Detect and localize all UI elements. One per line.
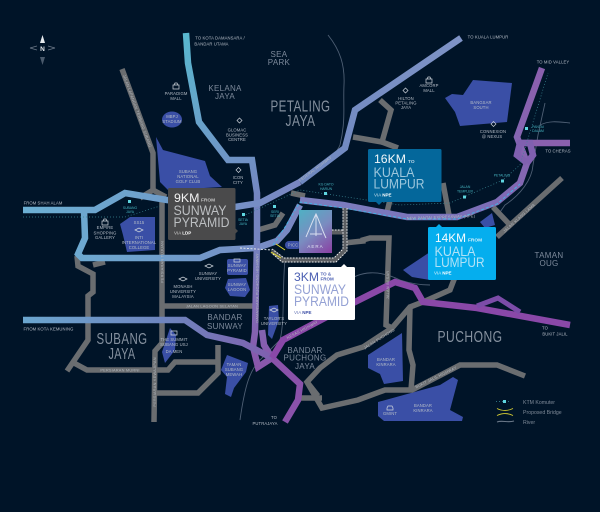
road labels: PERSIARAN TUJUAN xyxy=(160,241,164,283)
callout: 14km from Kuala Lumpur: 14KM xyxy=(435,231,466,245)
callout: 16km to Kuala Lumpur: LUMPUR xyxy=(374,176,425,192)
place labels: SS15 xyxy=(134,220,145,225)
place labels: NATIONAL xyxy=(177,174,199,179)
area: blue near 14km xyxy=(403,252,430,280)
place labels: SUBANG xyxy=(225,367,243,372)
station labels: TEMPLER xyxy=(457,190,474,194)
district labels: JAYA xyxy=(108,346,136,363)
direction labels: BUKIT JALIL xyxy=(542,332,568,336)
callout: 9km from Sunway Pyramid: PYRAMID xyxy=(174,215,230,230)
road labels: JALAN LAGOON SELATAN xyxy=(186,304,238,308)
place labels: GLOMAC xyxy=(228,128,246,132)
district labels: PUCHONG xyxy=(438,329,502,346)
direction labels: TO KUALA LUMPUR xyxy=(468,34,508,40)
place labels: SUNWAY xyxy=(228,282,246,287)
station labels: HARUN xyxy=(320,187,333,191)
direction labels: TO CHERAS xyxy=(545,148,571,154)
district labels: PETALING xyxy=(270,98,330,116)
place labels: BANGSAR xyxy=(470,100,492,105)
callout: 14km from Kuala Lumpur: LUMPUR xyxy=(434,255,485,270)
road: from Kota Damansara xyxy=(186,33,257,240)
district labels: JAYA xyxy=(215,92,235,101)
area: SS15 INTI xyxy=(120,217,155,252)
place labels: TAYLOR'S xyxy=(264,316,284,321)
area: Taman Subang Mewah xyxy=(221,355,248,397)
district labels: SEA xyxy=(271,50,288,59)
direction labels: TO xyxy=(542,326,549,330)
callout: 3km to and from Sunway Pyramid xyxy=(288,264,355,320)
road: interchange loop xyxy=(517,143,533,163)
road: to Bukit Jalil xyxy=(272,282,570,358)
direction labels: FROM KOTA KEMUNING xyxy=(24,326,73,332)
place labels: PYRAMID xyxy=(227,268,247,273)
place labels: GMINT xyxy=(383,411,397,416)
place labels: GALLERY xyxy=(95,235,115,240)
district labels: PARK xyxy=(268,58,291,67)
road labels: JALAN LAPANGAN TERBANG SUBANG xyxy=(122,74,153,148)
place labels: EMPIRE xyxy=(97,225,113,230)
station labels: SETIA xyxy=(238,218,249,222)
place labels: UNIVERSITY xyxy=(170,289,196,294)
callout: 14km from Kuala Lumpur: KUALA xyxy=(434,244,476,259)
road labels: DAMANSARA PUCHONG HIGHWAY xyxy=(254,253,260,323)
district labels: SUBANG xyxy=(96,331,148,348)
district labels: TAMAN xyxy=(535,251,563,260)
district labels xyxy=(96,50,563,371)
road labels: JALAN BESAR xyxy=(385,271,390,299)
road labels: PERSIARAN MURNI xyxy=(100,368,140,372)
area: Bandar Kinrara north xyxy=(368,333,403,384)
road labels: NESAS HIGHWAY xyxy=(286,319,319,340)
place labels: KINRARA xyxy=(413,408,433,413)
place labels: INTERNATIONAL xyxy=(122,240,157,245)
place labels: INTI xyxy=(135,235,143,240)
callout: 9km from Sunway Pyramid xyxy=(168,188,238,240)
district labels: BANDAR xyxy=(207,313,243,322)
Aera logo tile xyxy=(299,210,332,253)
place labels: TO xyxy=(271,415,278,420)
road: from Kota Kemuning xyxy=(23,320,272,358)
district labels: KELANA xyxy=(208,84,242,93)
direction labels: BANDAR UTAMA xyxy=(194,42,229,46)
district labels: BANDAR xyxy=(287,346,323,355)
station labels: SERI xyxy=(271,210,279,214)
road: LDP branch xyxy=(78,205,300,258)
road labels xyxy=(100,74,536,407)
road: Federal Highway from Shah Alam xyxy=(23,182,300,210)
callout: 14km from Kuala Lumpur xyxy=(428,224,496,280)
callout: 16km to Kuala Lumpur xyxy=(368,149,442,205)
place labels: SOUTH xyxy=(473,105,489,110)
area: Bandar Kinrara south xyxy=(378,377,463,421)
callout: 3km to and from Sunway Pyramid: 3KM xyxy=(294,270,319,284)
station labels: DALAM xyxy=(532,129,544,133)
rivers xyxy=(240,35,570,420)
station labels: JALAN xyxy=(460,185,471,189)
place labels: UNIVERSITY xyxy=(195,276,221,281)
callout: 16km to Kuala Lumpur: VIA NPE xyxy=(374,192,392,198)
callout: 9km from Sunway Pyramid: 9KM xyxy=(174,191,200,205)
callout: 3km to and from Sunway Pyramid: FROM xyxy=(320,276,334,282)
station labels: PETALING xyxy=(494,174,511,178)
station labels: SETIA xyxy=(270,214,281,218)
road: to Cheras xyxy=(520,140,570,146)
direction labels: FROM SHAH ALAM xyxy=(24,200,63,206)
place labels: GOLF CLUB xyxy=(176,179,200,184)
district labels: SUNWAY xyxy=(207,322,243,331)
road: NPE east xyxy=(300,68,542,217)
area: Subang National Golf Club xyxy=(156,137,222,190)
place labels: @ NEXUS xyxy=(482,134,502,139)
road labels: JALAN PUCHONG xyxy=(363,327,396,350)
district labels: JAYA xyxy=(286,113,316,130)
legend xyxy=(496,400,562,426)
place labels: STADIUM xyxy=(162,119,182,124)
place labels: LAGOON xyxy=(228,287,246,292)
place labels: BUSINESS xyxy=(226,132,248,138)
callout: 14km from Kuala Lumpur: FROM xyxy=(468,238,482,244)
place labels: JAYA xyxy=(401,105,411,110)
station labels: SUBANG xyxy=(123,206,138,210)
station labels: PANTAI xyxy=(532,125,544,129)
station labels: JAYA xyxy=(126,210,135,214)
place labels: BANDAR xyxy=(414,403,432,408)
compass xyxy=(30,35,55,65)
blue district areas xyxy=(120,80,512,421)
highways xyxy=(23,33,570,422)
place labels: COLLEGE xyxy=(129,245,149,250)
callout: 9km from Sunway Pyramid: VIA LDP xyxy=(174,230,191,236)
area: PICC xyxy=(285,241,301,249)
station labels: KG DATO xyxy=(319,182,334,186)
area: MBPJ stadium xyxy=(162,112,182,128)
place labels: MALL xyxy=(423,88,435,93)
road labels: NEW PANTAI EXPRESSWAY (NPE) xyxy=(407,213,476,221)
road labels: BUKIT JALIL HIGHWAY xyxy=(414,365,457,389)
place labels: TAMAN xyxy=(227,362,241,367)
legend: Proposed Bridge xyxy=(523,410,562,416)
area: Sunway Pyramid xyxy=(227,259,248,275)
place labels: PARADIGM xyxy=(165,91,188,96)
direction labels xyxy=(24,34,571,336)
area: Da Men xyxy=(162,328,176,363)
callout: 16km to Kuala Lumpur: TO xyxy=(408,159,415,165)
Aera logo tile: AERA xyxy=(307,244,324,249)
road: to Putrajaya xyxy=(272,358,300,422)
station labels: JAYA xyxy=(239,222,248,226)
callout: 3km to and from Sunway Pyramid: VIA NPE xyxy=(294,310,312,315)
district labels: JAYA xyxy=(295,362,315,371)
area: Taylor's University xyxy=(268,305,279,339)
place labels: BANDAR xyxy=(377,357,395,362)
compass: N xyxy=(40,46,45,53)
place labels: SUBANG USJ xyxy=(160,342,188,347)
place labels: THE SUMMIT xyxy=(160,337,188,342)
direction labels: TO MID VALLEY xyxy=(537,60,569,64)
place labels: CENTRE xyxy=(228,137,246,142)
legend: KTM Komuter xyxy=(523,400,555,406)
place labels: DA MEN xyxy=(166,349,182,354)
direction labels: TO KOTA DAMANSARA / xyxy=(195,36,245,40)
road: Federal Highway to Kuala Lumpur xyxy=(300,38,461,182)
place labels: KINRARA xyxy=(376,362,396,367)
place labels: SUBANG xyxy=(179,169,197,174)
callout: 3km to and from Sunway Pyramid: SUNWAY xyxy=(294,282,346,297)
grey local roads xyxy=(67,69,562,422)
place labels: MEWAH xyxy=(226,372,242,377)
road labels: FEDERAL HIGHWAY xyxy=(298,155,333,183)
area: small south of NPE xyxy=(480,213,495,228)
callout: 3km to and from Sunway Pyramid: PYRAMID xyxy=(294,294,349,309)
place labels: UNIVERSITY xyxy=(261,321,287,326)
road: white dashed Aera link xyxy=(240,248,272,250)
legend: River xyxy=(523,420,535,426)
place labels: ICON xyxy=(233,175,243,180)
place labels: MALAYSIA xyxy=(172,294,194,299)
district labels: OUG xyxy=(539,259,559,268)
station labels xyxy=(123,125,544,226)
PICC label: PICC xyxy=(288,242,298,248)
callout: 9km from Sunway Pyramid: FROM xyxy=(201,198,215,204)
area: Sunway Lagoon xyxy=(225,278,250,297)
place labels: MONASH xyxy=(174,284,192,289)
place labels: PUTRAJAYA xyxy=(253,421,278,426)
proposed link around Aera xyxy=(272,208,347,262)
KTM stations xyxy=(128,127,528,216)
callout: 14km from Kuala Lumpur: VIA NPE xyxy=(434,270,452,276)
place labels: CITY xyxy=(233,180,243,185)
callout: 16km to Kuala Lumpur: 16KM xyxy=(374,152,406,166)
callout: 16km to Kuala Lumpur: KUALA xyxy=(374,165,414,180)
callout: 9km from Sunway Pyramid: SUNWAY xyxy=(174,203,226,218)
place labels: PETALING xyxy=(395,100,417,106)
callout: 3km to and from Sunway Pyramid: TO & xyxy=(320,272,332,276)
area: Bangsar South xyxy=(445,80,512,126)
proposed bridge markers xyxy=(271,244,285,258)
road labels: PERSIARAN KEWAJIPAN xyxy=(152,357,157,407)
place labels: MBPJ xyxy=(166,114,178,119)
place labels: HILTON xyxy=(398,96,414,101)
road labels: JALAN KLANG LAMA xyxy=(502,202,536,234)
place labels: CONNEXION xyxy=(480,129,506,134)
place labels: AMCORP xyxy=(420,83,439,88)
place labels: SHOPPING xyxy=(94,230,116,236)
road: dashed NPE inner line xyxy=(273,184,520,245)
place labels: SUNWAY xyxy=(199,271,217,276)
district labels: PUCHONG xyxy=(284,354,326,362)
place labels xyxy=(94,77,506,426)
place labels: MALL xyxy=(170,96,182,101)
road: Damansara Puchong Highway xyxy=(253,240,272,367)
KTM Komuter dotted lines xyxy=(23,73,548,217)
place labels: SUNWAY xyxy=(228,263,246,268)
